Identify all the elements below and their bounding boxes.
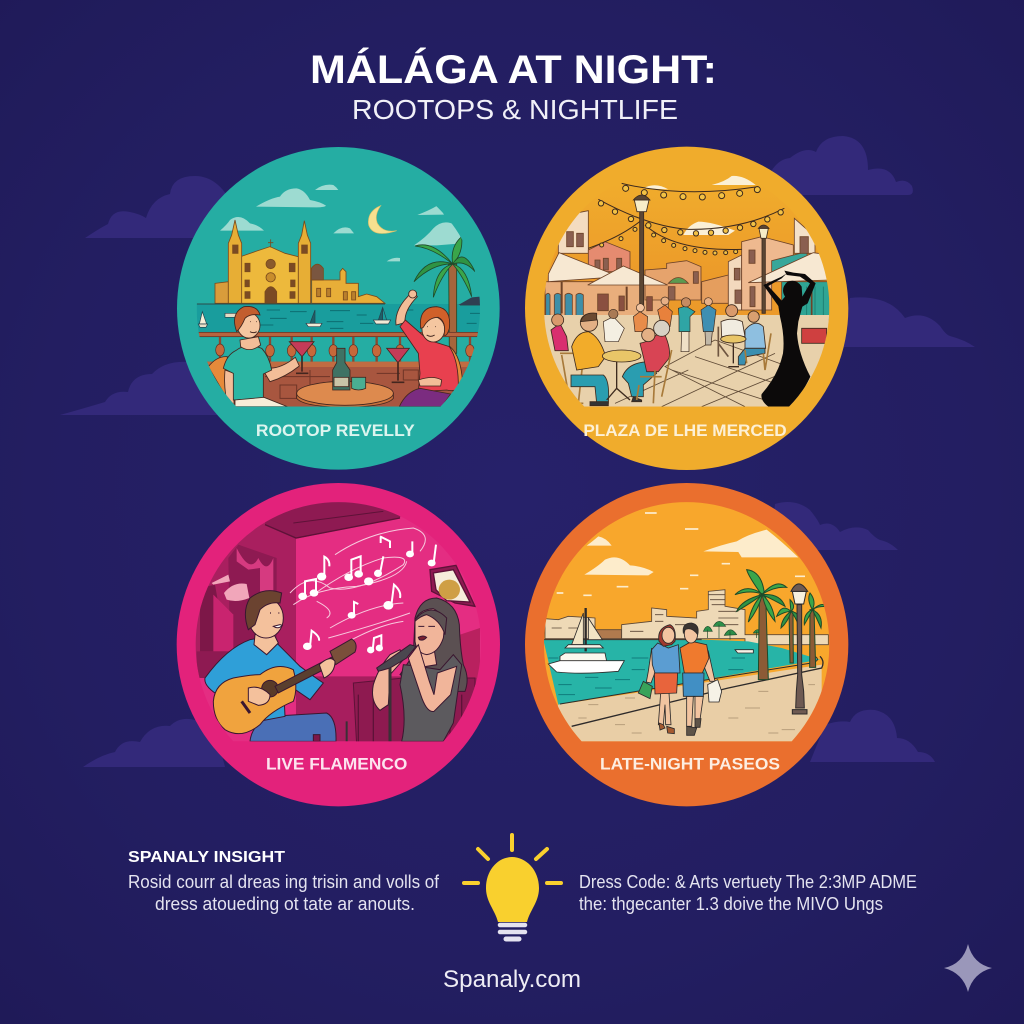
sailboats bbox=[198, 307, 391, 327]
label: plaza: PLAZA DE LHE MERCED bbox=[583, 421, 787, 440]
distant headland bbox=[458, 297, 480, 305]
icon: light bulb bbox=[464, 835, 561, 939]
balcony railing bbox=[198, 332, 480, 363]
walking couple bbox=[638, 623, 722, 735]
lamp posts bbox=[633, 195, 769, 313]
clouds bbox=[712, 176, 756, 185]
harbour water bbox=[543, 640, 820, 705]
curtain bbox=[228, 545, 277, 651]
string lights bbox=[588, 183, 784, 255]
right cafe table group bbox=[718, 305, 827, 370]
insight text left: dress atoueding ot tate ar anouts. bbox=[155, 894, 415, 914]
brick wall bbox=[207, 362, 470, 406]
woman waving bbox=[396, 290, 463, 407]
label: live flamenco: LIVE FLAMENCO bbox=[266, 755, 407, 774]
insight heading: SPANALY INSIGHT bbox=[128, 849, 285, 866]
insight text right: the: thgecanter 1.3 doive the MIVO Ungs bbox=[579, 894, 883, 914]
footer website: Spanaly.com bbox=[443, 966, 581, 993]
icon: sparkle bbox=[944, 944, 992, 992]
palm trees bbox=[735, 570, 825, 680]
musical notes bbox=[290, 528, 425, 648]
insight text left: Rosid courr al dreas ing trisin and volls of bbox=[128, 872, 440, 892]
panel: live flamenco bbox=[177, 483, 500, 806]
yacht bbox=[548, 608, 753, 673]
sea bbox=[197, 304, 483, 337]
promenade bbox=[535, 665, 822, 755]
plaza buildings bbox=[545, 211, 830, 320]
left cafe table group bbox=[551, 313, 672, 406]
plaza paving bbox=[542, 315, 832, 410]
label: rooftop revelry: ROOTOP REVELLY bbox=[256, 421, 416, 440]
singer bbox=[347, 598, 467, 741]
panel: late-night paseos bbox=[525, 483, 848, 806]
background clouds bbox=[60, 136, 975, 767]
panel: rooftop revelry bbox=[177, 147, 500, 470]
guitarist bbox=[205, 591, 356, 741]
title: MÁLÁGA AT NIGHT: bbox=[310, 47, 717, 92]
distant palms bbox=[703, 621, 762, 640]
city skyline bbox=[545, 590, 828, 645]
sky clouds bbox=[220, 185, 462, 261]
moon bbox=[368, 206, 397, 233]
insight text left bbox=[128, 872, 440, 914]
guitar bbox=[213, 639, 356, 734]
subtitle: ROOTOPS & NIGHTLIFE bbox=[352, 94, 678, 125]
insight text right: Dress Code: & Arts vertuety The 2:3MP ADME bbox=[579, 872, 917, 892]
flamenco dancer silhouette bbox=[761, 271, 816, 407]
cathedral skyline bbox=[215, 220, 385, 303]
street lamp bbox=[791, 584, 808, 714]
lower wall and bar bbox=[296, 676, 480, 745]
insight text right bbox=[579, 872, 917, 914]
dark left wall and ceiling bbox=[193, 501, 296, 678]
man with cocktail bbox=[208, 306, 299, 407]
palm tree bbox=[414, 237, 475, 353]
table with bottle and cocktails bbox=[289, 342, 409, 407]
cafe umbrellas bbox=[548, 252, 827, 315]
label: late-night paseos: LATE-NIGHT PASEOS bbox=[600, 755, 780, 774]
wall ornament bbox=[224, 584, 249, 601]
clouds bbox=[557, 513, 805, 595]
framed picture bbox=[430, 565, 475, 606]
standing crowd bbox=[603, 297, 716, 352]
panel: plaza de la merced bbox=[525, 147, 848, 470]
